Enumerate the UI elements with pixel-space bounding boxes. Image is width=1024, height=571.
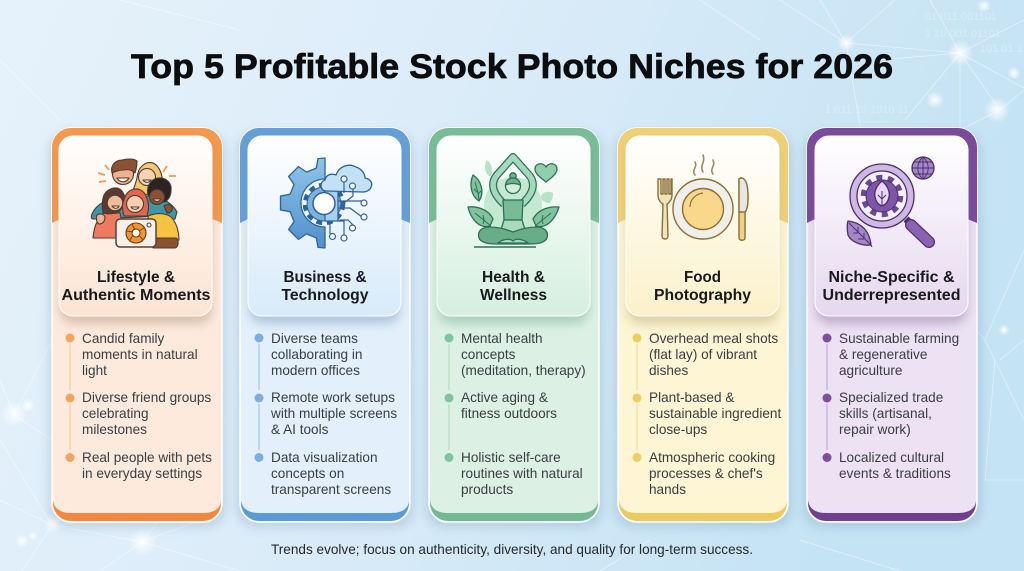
list: Localized cultural	[839, 450, 944, 465]
list: repair work)	[839, 422, 911, 437]
bullets	[822, 334, 832, 462]
yellow shirt	[148, 214, 179, 246]
list: Mental health	[461, 331, 543, 346]
list: concepts on	[271, 466, 344, 481]
list	[270, 331, 397, 497]
panel: business	[236, 128, 414, 528]
list: agriculture	[839, 363, 902, 378]
heart	[535, 164, 557, 182]
list: Diverse teams	[271, 331, 358, 346]
panel: health	[425, 128, 603, 528]
list: Holistic self-care	[461, 450, 561, 465]
heading: Lifestyle &	[97, 269, 175, 286]
background: 101 01 1	[980, 43, 1023, 55]
icon: meditating figure with leaves and heart	[468, 157, 559, 247]
footer note: Trends evolve; focus on authenticity, diversity, and quality for long-term success.	[271, 542, 753, 557]
list: Atmospheric cooking	[649, 450, 775, 465]
list: concepts	[461, 347, 516, 362]
bottom band	[808, 500, 976, 521]
top band	[240, 128, 410, 223]
coral shirt	[93, 211, 125, 238]
list: sustainable ingredient	[649, 406, 781, 421]
heading: Wellness	[480, 287, 547, 304]
list: skills (artisanal,	[839, 406, 932, 421]
list: processes & chef's	[649, 466, 763, 481]
list: collaborating in	[271, 347, 362, 362]
list: Sustainable farming	[839, 331, 959, 346]
background: 1 10 001 01101	[925, 28, 1001, 40]
list: hands	[649, 482, 686, 497]
bullets	[632, 334, 642, 462]
heading: Health &	[482, 269, 545, 286]
title: Top 5 Profitable Stock Photo Niches for 2026	[131, 48, 893, 86]
back person bodies	[91, 196, 177, 220]
brown haired friend	[112, 164, 134, 184]
list: products	[461, 482, 513, 497]
top band	[807, 128, 977, 223]
panel: lifestyle	[48, 128, 226, 528]
list: Candid family	[82, 331, 165, 346]
list	[649, 331, 781, 497]
heading: Food	[684, 269, 721, 286]
blonde friend	[133, 163, 165, 195]
background: 01 011 001101	[925, 11, 997, 23]
dark haired friend	[148, 178, 171, 202]
list: Plant-based &	[649, 390, 734, 405]
list	[82, 331, 212, 481]
list: & AI tools	[271, 422, 329, 437]
bullets	[444, 334, 454, 462]
heading	[62, 269, 210, 304]
list: modern offices	[271, 363, 360, 378]
heading: Underrepresented	[822, 287, 960, 304]
timeline	[448, 344, 450, 450]
icon: group of friends with camera	[91, 159, 179, 248]
list: Remote work setups	[271, 390, 395, 405]
left front friend	[102, 188, 125, 214]
list: with multiple screens	[270, 406, 397, 421]
heading	[282, 269, 369, 304]
list: transparent screens	[271, 482, 391, 497]
red haired friend	[123, 189, 148, 216]
list: close-ups	[649, 422, 707, 437]
bottom band	[619, 500, 787, 521]
heading: Authentic Moments	[62, 287, 210, 304]
bottom band	[53, 500, 221, 521]
torso	[503, 200, 523, 220]
bullets	[254, 334, 264, 462]
legs	[479, 227, 547, 244]
heading: Business &	[284, 269, 366, 286]
bottom band	[241, 500, 409, 521]
heading: Technology	[282, 287, 369, 304]
list	[839, 331, 959, 481]
background: 1 011 10 1010 11	[825, 104, 909, 116]
list: Active aging &	[461, 390, 548, 405]
leaves	[471, 175, 482, 201]
list	[461, 331, 586, 497]
camera	[116, 219, 156, 247]
timeline	[69, 344, 71, 450]
list: (meditation, therapy)	[461, 363, 586, 378]
timeline	[636, 344, 638, 450]
heading	[480, 269, 547, 304]
list: Specialized trade	[839, 390, 943, 405]
head	[506, 178, 520, 194]
list: fitness outdoors	[461, 406, 557, 421]
arms	[493, 157, 533, 204]
icon: magnifier with gear, leaf and globe	[847, 157, 934, 247]
list: & regenerative	[839, 347, 927, 362]
list: milestones	[82, 422, 147, 437]
top band	[52, 128, 222, 223]
timeline	[258, 344, 260, 450]
heading	[654, 269, 751, 304]
list: Diverse friend groups	[82, 390, 211, 405]
list: Overhead meal shots	[649, 331, 778, 346]
list: celebrating	[82, 406, 149, 421]
list: dishes	[649, 363, 688, 378]
list: (flat lay) of vibrant	[649, 347, 757, 362]
panel: niche-specific	[803, 128, 981, 528]
top band	[429, 128, 599, 223]
list: light	[82, 363, 107, 378]
heading: Photography	[654, 287, 751, 304]
list: in everyday settings	[82, 466, 202, 481]
bullets	[66, 334, 74, 462]
icon: plate with fork and knife	[658, 155, 748, 240]
panel: food	[614, 128, 792, 528]
list: events & traditions	[839, 466, 951, 481]
list: Real people with pets	[82, 450, 212, 465]
list: moments in natural	[82, 347, 198, 362]
heading	[822, 269, 960, 304]
bottom band	[430, 500, 598, 521]
list: Data visualization	[271, 450, 378, 465]
top band	[618, 128, 788, 223]
heading: Niche-Specific &	[828, 269, 954, 286]
list: routines with natural	[461, 466, 583, 481]
icon: gear, cloud and circuit	[280, 158, 372, 248]
timeline	[826, 344, 828, 450]
